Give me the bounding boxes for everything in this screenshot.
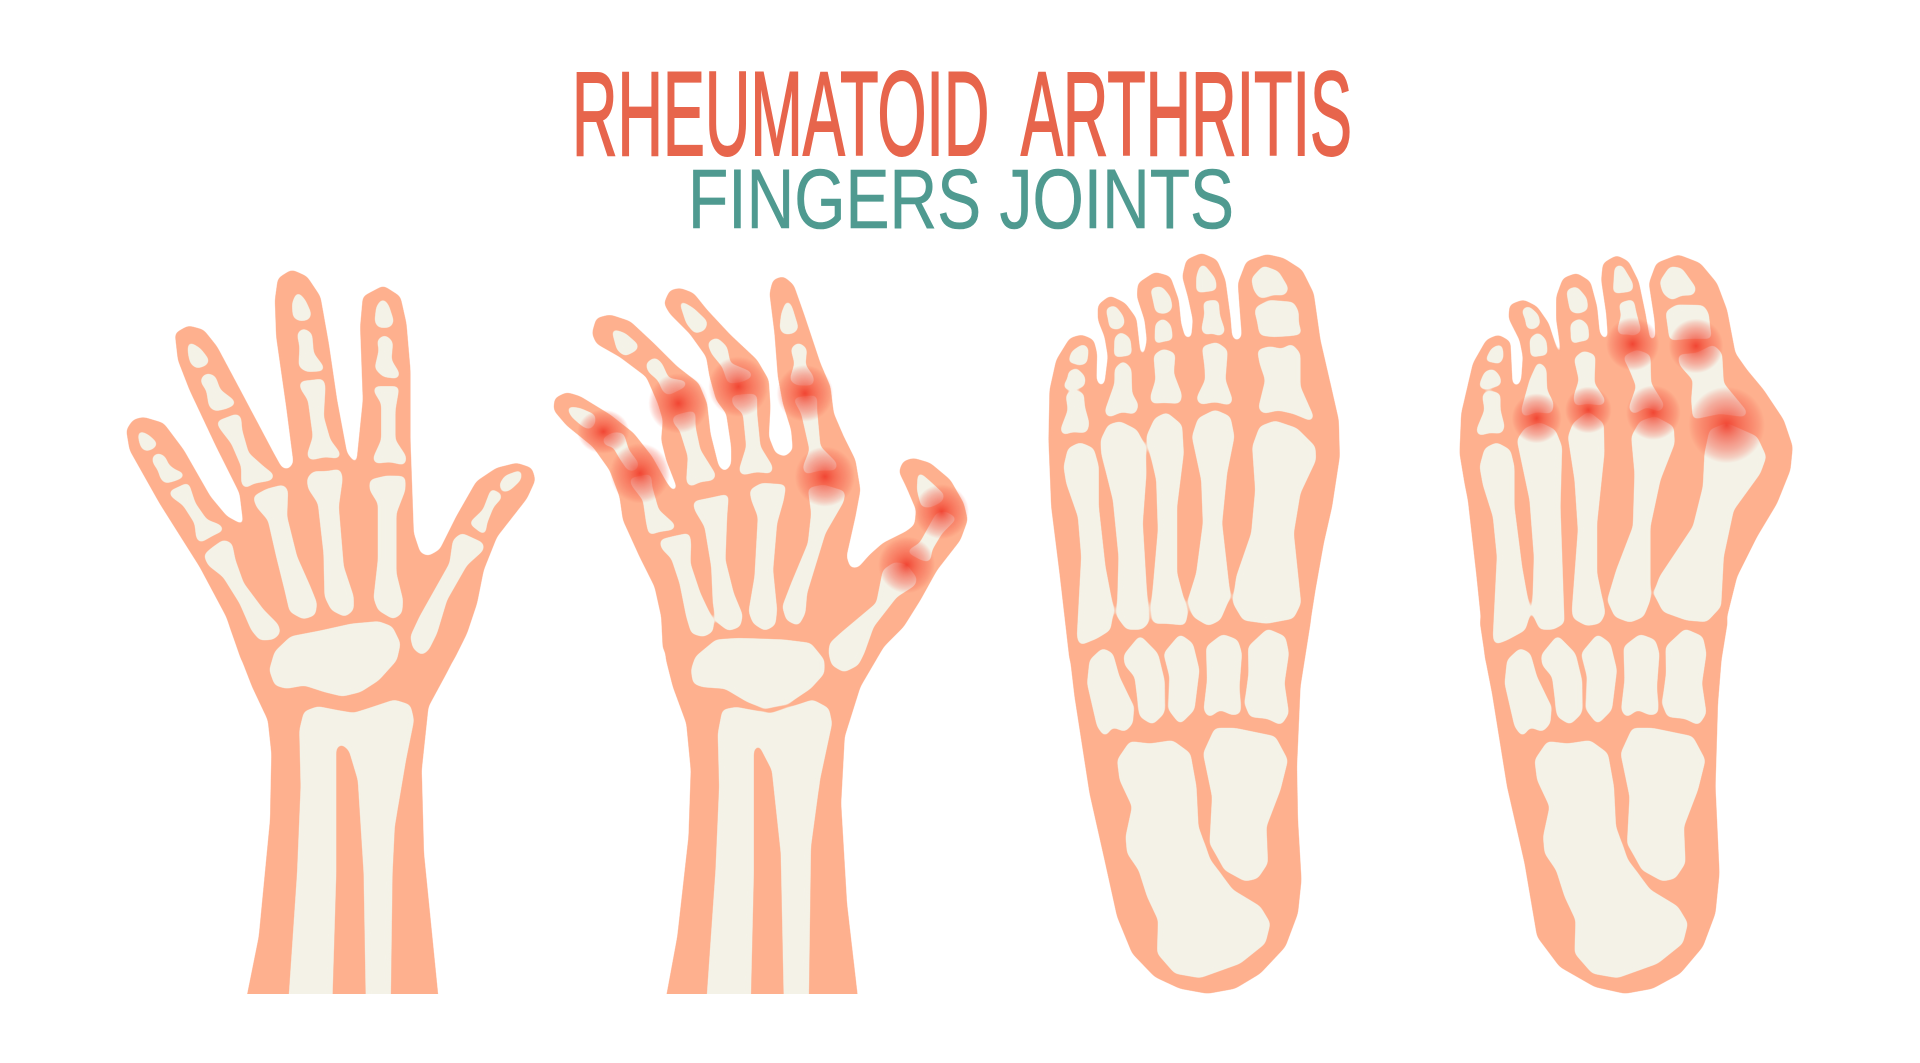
infographic	[126, 70, 1793, 994]
inflamed joints: foot	[1512, 317, 1765, 463]
inflamed hand	[554, 277, 969, 1007]
inflamed foot	[1460, 255, 1792, 993]
subtitle: FINGERS JOINTS	[688, 152, 1234, 246]
healthy foot	[1049, 253, 1339, 993]
inflamed joints: hand	[577, 357, 969, 593]
healthy hand	[127, 270, 535, 1007]
